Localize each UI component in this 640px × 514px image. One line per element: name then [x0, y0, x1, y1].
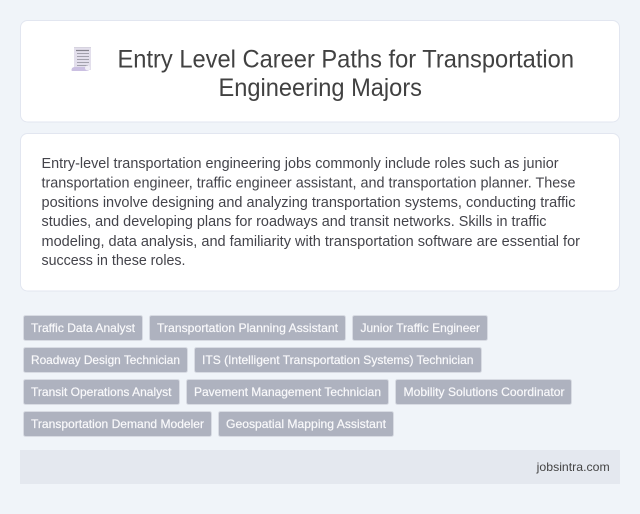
tag: Transportation Demand Modeler: Transportation Demand Modeler	[31, 417, 204, 431]
tag: Roadway Design Technician: Roadway Design Technician	[31, 353, 180, 367]
text block: description: transportation engineer, traffic engineer assistant, and transportation planner. These	[42, 176, 576, 192]
icon: document scroll	[72, 47, 91, 71]
text block: description: Entry-level transportation engineering jobs commonly include roles such as junior	[42, 156, 559, 172]
tag: Transit Operations Analyst: Transit Operations Analyst	[31, 385, 172, 399]
heading	[118, 46, 574, 102]
footer	[20, 450, 620, 484]
heading: Engineering Majors	[218, 75, 422, 102]
text block: description: positions involve designing and analyzing transportation systems, conducting traffic	[42, 195, 576, 211]
tag: Pavement Management Technician	[186, 380, 388, 404]
tag: Geospatial Mapping Assistant: Geospatial Mapping Assistant	[226, 417, 387, 431]
tag: Roadway Design Technician	[24, 348, 188, 372]
tag: Geospatial Mapping Assistant	[218, 412, 394, 436]
tag: Transportation Planning Assistant	[150, 316, 346, 340]
tag: Transportation Planning Assistant: Transportation Planning Assistant	[157, 321, 339, 335]
tag: ITS Technician	[194, 348, 482, 372]
text block: description: modeling, data analysis, and familiarity with transportation software are essential for	[42, 234, 580, 250]
tag: Mobility Solutions Coordinator	[396, 380, 572, 404]
heading: Entry Level Career Paths for Transportation	[118, 46, 574, 74]
tag: Junior Traffic Engineer: Junior Traffic Engineer	[360, 321, 480, 335]
text block: description: studies, and developing plans for roadways and transit networks. Skills in traffic	[42, 214, 546, 230]
footer source text: jobsintra.com	[536, 460, 610, 474]
text block: description: success in these roles.	[42, 253, 186, 269]
tag: Traffic Data Analyst: Traffic Data Analyst	[31, 321, 136, 335]
tag: Pavement Management Technician: Pavement Management Technician	[194, 385, 381, 399]
tag list	[24, 316, 572, 436]
tag: Junior Traffic Engineer	[352, 316, 488, 340]
tag: Traffic Data Analyst	[24, 316, 142, 340]
tag: ITS Technician: ITS (Intelligent Transportation Systems) Technician	[202, 353, 474, 367]
tag: Mobility Solutions Coordinator: Mobility Solutions Coordinator	[404, 385, 564, 399]
panel: description	[20, 134, 620, 291]
text block: description	[42, 156, 580, 269]
tag: Transit Operations Analyst	[24, 380, 180, 404]
panel: title header	[20, 20, 620, 122]
tag: Transportation Demand Modeler	[24, 412, 212, 436]
